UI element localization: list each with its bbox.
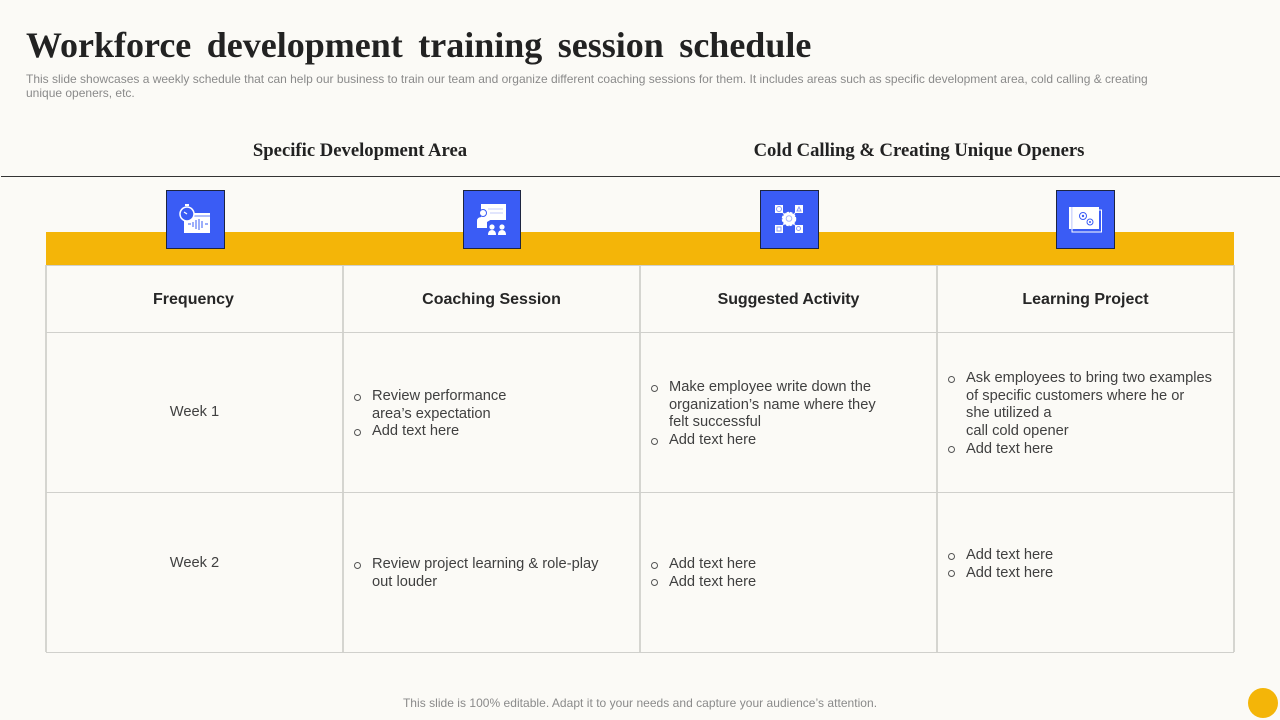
cell: week 1 suggested activity: Make employee write down the xyxy=(669,379,871,395)
cell: week 1 learning project: Ask employees to bring two examples xyxy=(966,370,1212,386)
cell: week 2 learning project xyxy=(948,547,1053,581)
cell: week 2 learning project: Add text here xyxy=(966,547,1053,563)
section heading: specific development area: Specific Development Area xyxy=(253,140,467,161)
icon: stopwatch and audio window xyxy=(166,190,225,249)
column header: learning project: Learning Project xyxy=(1022,291,1149,308)
cell: week 1 learning project: she utilized a xyxy=(966,405,1052,421)
cell: week 1 learning project: Add text here xyxy=(966,441,1053,457)
cell: week 1 coaching session xyxy=(354,388,506,439)
subtitle text: This slide showcases a weekly schedule that can help our business to train our team and organize different coaching sessions for them. It includes areas such as specific development area, cold calling & creating xyxy=(26,72,1148,86)
icon: stacked pages with gears xyxy=(1056,190,1115,249)
subtitle text xyxy=(26,72,1148,100)
cell: week 1 learning project: of specific customers where he or xyxy=(966,388,1184,404)
cell: week 2 coaching session: Review project learning & role-play xyxy=(372,556,598,572)
subtitle text: unique openers, etc. xyxy=(26,86,135,100)
yellow corner circle xyxy=(1248,688,1278,718)
yellow band xyxy=(46,232,1234,265)
row label: week 2: Week 2 xyxy=(170,555,219,571)
column header: coaching session: Coaching Session xyxy=(422,291,561,308)
section heading: cold calling: Cold Calling & Creating Unique Openers xyxy=(754,140,1084,161)
column header: suggested activity: Suggested Activity xyxy=(718,291,859,308)
icon: gear network xyxy=(760,190,819,249)
cell: week 2 coaching session xyxy=(354,556,598,590)
cell: week 1 learning project: call cold opener xyxy=(966,423,1069,439)
icon: presenter with audience xyxy=(463,190,521,249)
cell: week 2 suggested activity: Add text here xyxy=(669,556,756,572)
cell: week 1 suggested activity xyxy=(651,379,876,448)
cell: week 2 coaching session: out louder xyxy=(372,574,437,590)
cell: week 2 learning project: Add text here xyxy=(966,565,1053,581)
cell: week 1 coaching session: Add text here xyxy=(372,423,459,439)
header rule xyxy=(1,176,1280,177)
cell: week 1 suggested activity: organization’s name where they xyxy=(669,397,876,413)
row label: week 1: Week 1 xyxy=(170,404,219,420)
cell: week 1 coaching session: area’s expectation xyxy=(372,406,491,422)
cell: week 1 suggested activity: felt successful xyxy=(669,414,761,430)
cell: week 1 coaching session: Review performance xyxy=(372,388,506,404)
footer note: This slide is 100% editable. Adapt it to your needs and capture your audience’s attention. xyxy=(403,696,877,710)
column header: frequency: Frequency xyxy=(153,291,234,308)
cell: week 1 learning project xyxy=(948,370,1212,457)
cell: week 2 suggested activity xyxy=(651,556,756,590)
cell: week 2 suggested activity: Add text here xyxy=(669,574,756,590)
title: Workforce development training session schedule xyxy=(26,25,811,65)
cell: week 1 suggested activity: Add text here xyxy=(669,432,756,448)
